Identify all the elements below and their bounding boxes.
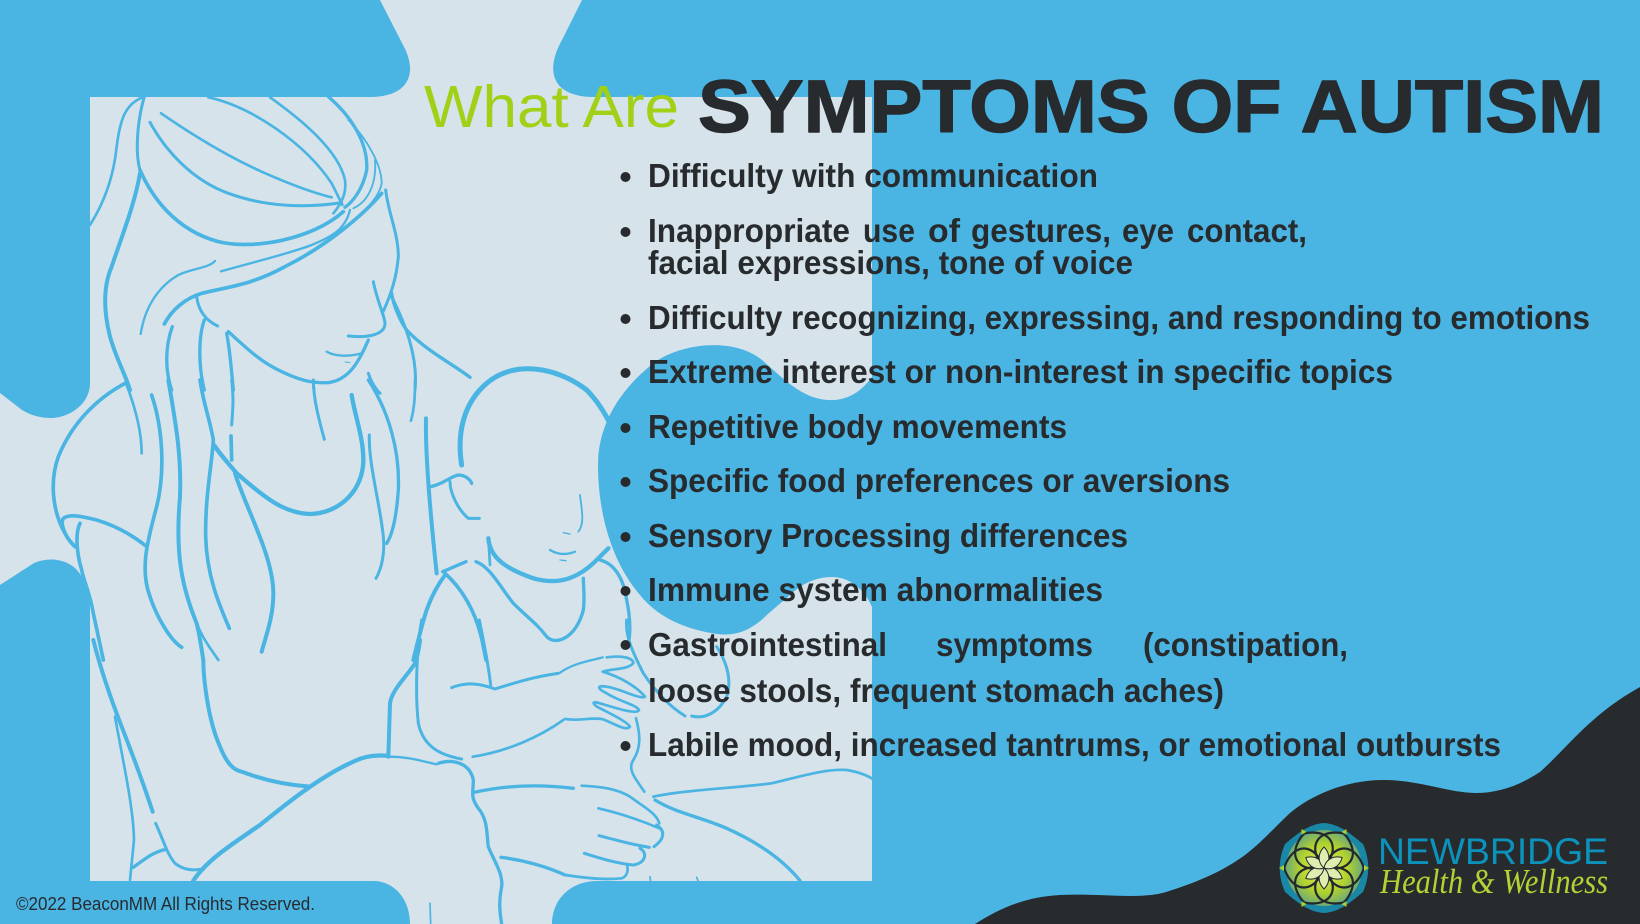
list item: gestures and expressions: contact, [1187,212,1307,249]
blue shape: right panel with central blob [552,0,1640,924]
mother torso and long hair [53,380,415,660]
baby arm, hands and blanket [417,620,873,924]
title: What Are: What Are [424,74,679,140]
list item: gestures and expressions: facial expressions, tone of voice [648,244,1133,281]
list item: gestures and expressions: use [863,212,915,249]
list item: gastrointestinal symptoms: loose stools, frequent stomach aches) [648,672,1224,709]
list item: gestures and expressions: eye [1122,212,1174,249]
list item: gastrointestinal symptoms: symptoms [936,626,1093,663]
list item: gastrointestinal symptoms [620,626,1348,709]
title: Symptoms of Autism: SYMPTOMS OF AUTISM [698,65,1604,148]
dark wave corner [975,687,1640,924]
list item: gestures and expressions: Inappropriate [648,212,850,249]
list item: gastrointestinal symptoms: Gastrointestinal [648,626,887,663]
icon: flower of life emblem [1279,823,1369,913]
blue shape: bottom left frame [0,559,410,924]
list item: gestures and expressions [620,212,1307,281]
list item: emotions: Difficulty recognizing, expressing, and responding to emotions [648,299,1590,336]
list item: sensory processing: Sensory Processing differences [648,517,1128,554]
list item: interests: Extreme interest or non-interest in specific topics [648,353,1393,390]
list item: immune system: Immune system abnormalities [648,571,1103,608]
list item: labile mood: Labile mood, increased tantrums, or emotional outbursts [648,726,1501,763]
logo text: Health and Wellness: Health & Wellness [1379,862,1608,901]
list item: communication: Difficulty with communication [648,157,1098,194]
baby head and upper body [413,369,630,660]
list item: gestures and expressions: gestures, [971,212,1111,249]
list item: food preferences: Specific food preferences or aversions [648,462,1230,499]
list item: gestures and expressions: of [928,212,961,249]
blue shape: top left frame [0,0,410,418]
title [424,65,1604,148]
logo: Newbridge Health and Wellness [1279,823,1608,913]
logo text: Newbridge: NEWBRIDGE [1378,831,1608,872]
mother arm and knee [93,640,437,881]
list item: repetitive movements: Repetitive body movements [648,408,1067,445]
list item: gastrointestinal symptoms: (constipation, [1143,626,1348,663]
symptom list [620,157,1590,763]
illustration: mother holding baby line art [53,97,873,924]
mother head and upper hair [90,97,470,393]
copyright: ©2022 BeaconMM All Rights Reserved. [16,894,315,914]
